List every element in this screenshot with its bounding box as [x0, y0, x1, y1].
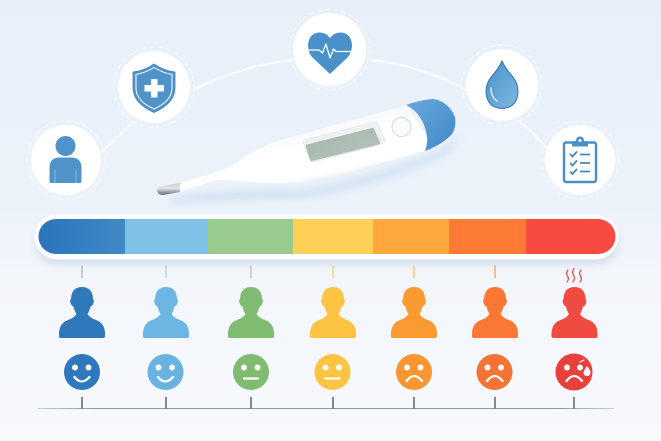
baseline axis with ticks: [38, 397, 614, 409]
bar segment: amber: [373, 219, 450, 254]
face: neutral: [233, 354, 269, 390]
person: light blue: [143, 287, 189, 338]
bar segment: deep blue: [38, 219, 126, 254]
thermometer metal tip: [157, 183, 180, 195]
connecting arc lines: [101, 60, 548, 152]
face: uneasy: [314, 354, 350, 390]
person: green: [228, 287, 274, 338]
person: red: [552, 287, 598, 338]
connector ticks: [82, 266, 495, 278]
icon: clipboard badge: [541, 121, 619, 199]
person: orange: [472, 287, 518, 338]
person figures: [59, 287, 598, 338]
person: yellow: [310, 287, 356, 338]
temperature colour bar: [34, 214, 618, 264]
bar segment: yellow: [293, 219, 374, 254]
icon: heart badge: [290, 10, 370, 90]
thermometer body: [179, 105, 427, 192]
person: amber: [391, 287, 437, 338]
thermometer blue cap: [406, 99, 455, 151]
thermometer shadow: [172, 135, 462, 204]
icon: water drop badge: [462, 45, 542, 125]
bar segment: light blue: [125, 219, 208, 254]
icon: person badge: [27, 121, 105, 199]
face: feverish with sweat drop: [556, 354, 592, 390]
bar segment: orange: [449, 219, 526, 254]
thermometer display: [303, 122, 385, 162]
thermometer button: [392, 118, 411, 136]
mood faces: [64, 354, 592, 390]
face: sad: [396, 354, 432, 390]
bar segment: green: [208, 219, 294, 254]
icon: shield badge: [114, 47, 194, 127]
face: happy: [148, 354, 184, 390]
icon: heat waves: [567, 268, 581, 282]
face: sadder: [476, 354, 512, 390]
person: deep blue: [59, 287, 105, 338]
thermometer: [157, 99, 462, 204]
bar segment: red: [526, 219, 616, 254]
face: very happy: [64, 354, 100, 390]
